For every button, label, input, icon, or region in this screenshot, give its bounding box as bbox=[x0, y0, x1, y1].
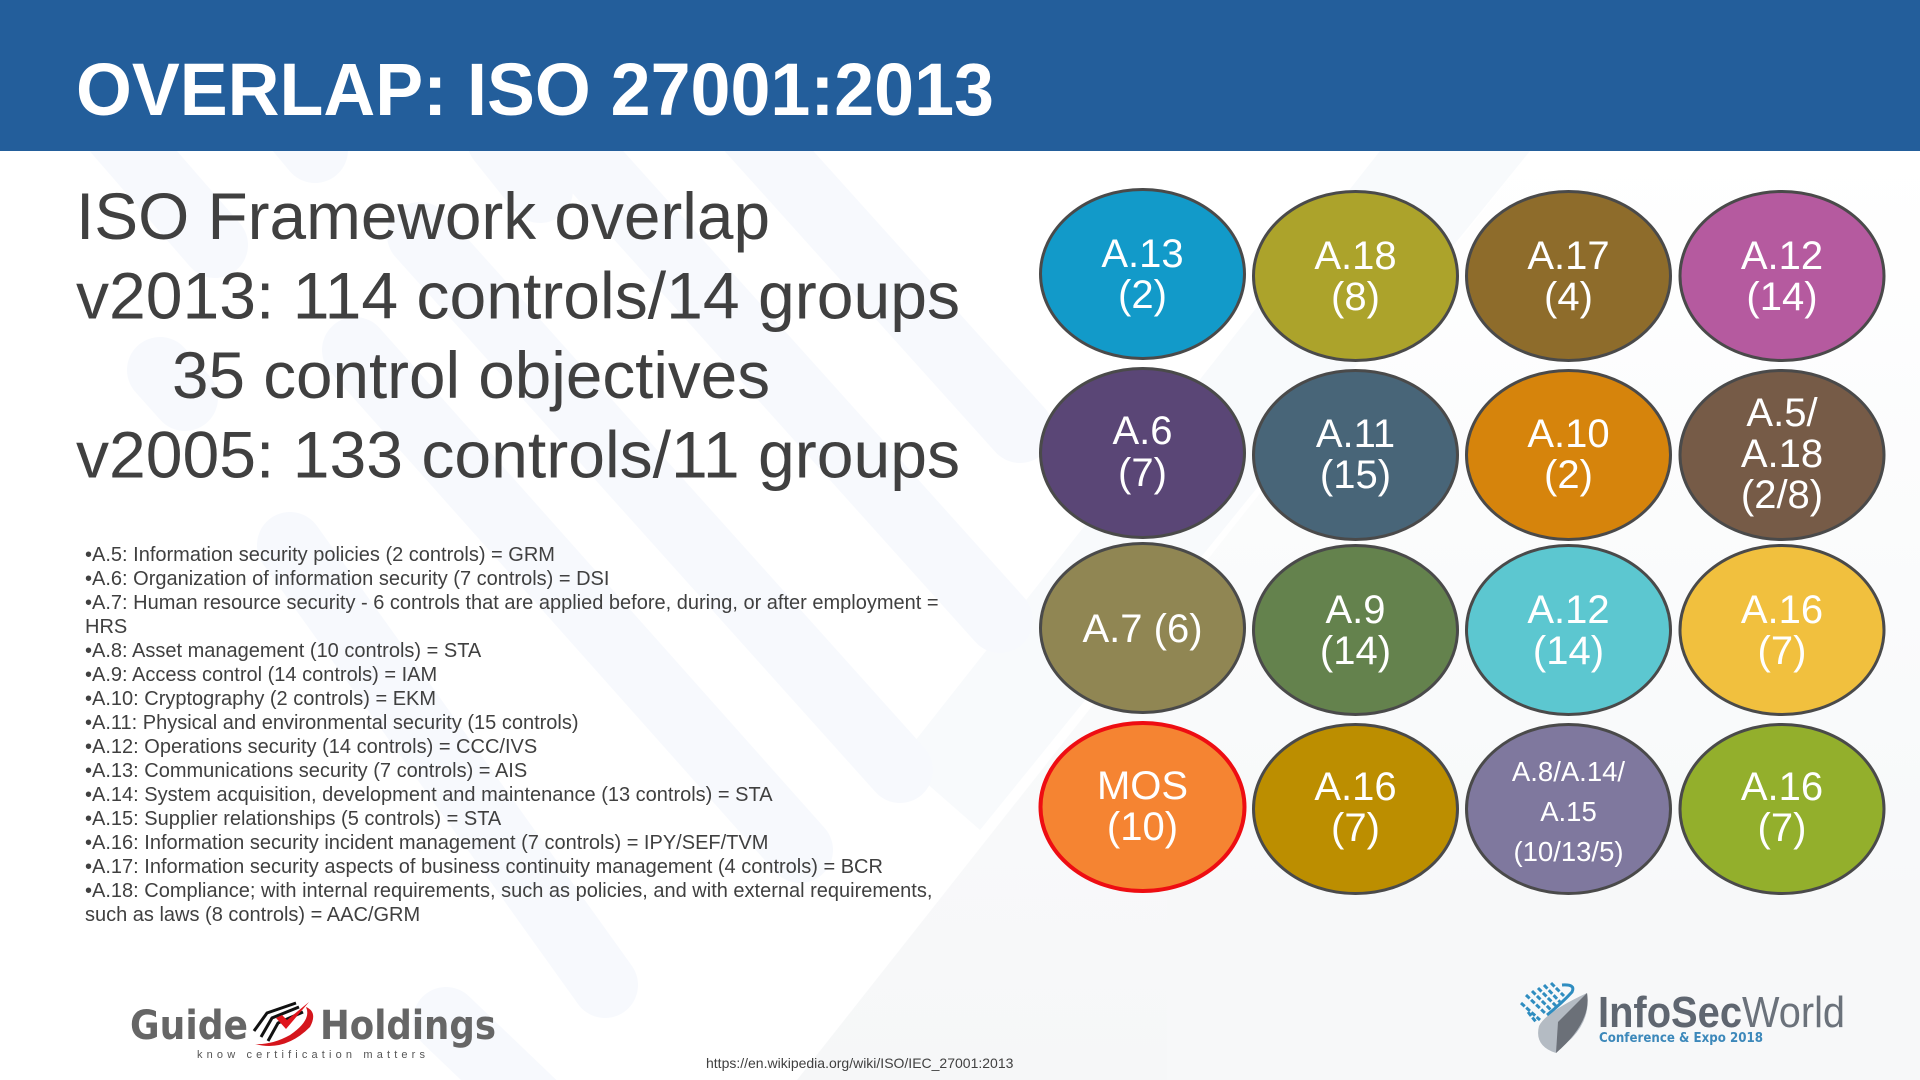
ellipse: A.5/A.18: (2/8) bbox=[1741, 473, 1823, 517]
ellipse: A.6: (7) bbox=[1118, 451, 1167, 495]
ellipse: A.9 bbox=[1254, 546, 1458, 714]
ellipse: A.7: A.7 (6) bbox=[1082, 607, 1203, 651]
logo: InfoSecWorld bbox=[1521, 983, 1845, 1053]
ellipse: A.18: (8) bbox=[1331, 275, 1380, 319]
ellipse: A.12 bbox=[1466, 546, 1670, 714]
control list text block bbox=[85, 544, 939, 926]
ellipse: A.18 bbox=[1254, 192, 1458, 360]
ellipse: A.16 bbox=[1680, 546, 1884, 714]
ellipse: A.16: (7) bbox=[1758, 629, 1806, 673]
ellipse: A.17: A.17 bbox=[1527, 234, 1610, 278]
control list text block: •A.16: Information security incident management (7 controls) = IPY/SEF/TVM bbox=[85, 832, 768, 854]
control list text block: •A.17: Information security aspects of business continuity management (4 controls) = BCR bbox=[85, 856, 883, 878]
icon: shield bbox=[1521, 983, 1588, 1053]
ellipse: A.10: A.10 bbox=[1527, 412, 1610, 456]
logo: InfoSecWorld: InfoSec bbox=[1598, 988, 1742, 1037]
ellipse: A.8/A.14/A.15: A.15 bbox=[1540, 796, 1597, 827]
header banner bbox=[0, 0, 1920, 151]
heading text block: ISO Framework overlap bbox=[76, 179, 770, 253]
ellipse: A.17: (4) bbox=[1544, 275, 1593, 319]
ellipse: A.8/A.14/A.15 bbox=[1466, 724, 1670, 894]
ellipse: A.12: A.12 bbox=[1741, 234, 1823, 278]
logo: InfoSecWorld: World bbox=[1742, 988, 1845, 1037]
ellipse: A.13: A.13 bbox=[1101, 232, 1184, 276]
control list text block: •A.10: Cryptography (2 controls) = EKM bbox=[85, 688, 436, 710]
ellipse: A.17 bbox=[1466, 192, 1670, 360]
heading text block: 35 control objectives bbox=[172, 338, 770, 412]
ellipse: A.12: (14) bbox=[1533, 629, 1604, 673]
ellipse: A.12: (14) bbox=[1746, 275, 1818, 319]
ellipse: A.10: (2) bbox=[1544, 453, 1593, 497]
icon: cards and check mark bbox=[254, 1002, 313, 1046]
ellipse: A.9: (14) bbox=[1320, 629, 1391, 673]
ellipse: A.16: (7) bbox=[1758, 806, 1806, 850]
ellipse: A.13: (2) bbox=[1118, 273, 1167, 317]
ellipse: A.11: A.11 bbox=[1316, 412, 1395, 456]
ellipse: A.16: (7) bbox=[1331, 806, 1380, 850]
ellipse: A.16 bbox=[1254, 724, 1458, 894]
ellipse: A.12 bbox=[1680, 192, 1884, 360]
control list text block: •A.11: Physical and environmental security (15 controls) bbox=[85, 712, 579, 734]
ellipse: A.6: A.6 bbox=[1112, 409, 1173, 453]
ellipse: A.5/A.18: A.5/ bbox=[1746, 391, 1818, 435]
logo: Guide Holdings: know certification matters bbox=[197, 1049, 426, 1061]
ellipse: A.11: (15) bbox=[1320, 453, 1391, 497]
ellipse: A.10 bbox=[1466, 370, 1670, 540]
control list text block: such as laws (8 controls) = AAC/GRM bbox=[85, 904, 420, 926]
control list text block: HRS bbox=[85, 616, 127, 638]
ellipse: A.16: A.16 bbox=[1741, 588, 1823, 632]
logo: Guide Holdings: Guide bbox=[130, 1003, 248, 1049]
ellipse: A.16: A.16 bbox=[1741, 765, 1823, 809]
control list text block: •A.9: Access control (14 controls) = IAM bbox=[85, 664, 437, 686]
ellipse: A.16: A.16 bbox=[1314, 765, 1397, 809]
heading text block bbox=[76, 179, 960, 492]
ellipse: A.7 bbox=[1040, 544, 1244, 712]
logo: Guide Holdings: Holdings bbox=[320, 1003, 496, 1049]
ellipse: A.8/A.14/A.15: (10/13/5) bbox=[1513, 836, 1624, 867]
ellipse: A.11 bbox=[1254, 370, 1458, 540]
ellipse: MOS: (10) bbox=[1107, 805, 1178, 849]
ellipse: A.9: A.9 bbox=[1325, 588, 1386, 632]
control list text block: •A.13: Communications security (7 controls) = AIS bbox=[85, 760, 527, 782]
control group ellipses grid bbox=[1040, 190, 1884, 894]
ellipse: A.5/A.18: A.18 bbox=[1741, 432, 1823, 476]
logo: Guide Holdings bbox=[130, 1002, 496, 1061]
ellipse: A.8/A.14/A.15: A.8/A.14/ bbox=[1512, 756, 1625, 787]
ellipse: A.5/A.18 bbox=[1680, 370, 1884, 540]
control list text block: •A.6: Organization of information security (7 controls) = DSI bbox=[85, 568, 609, 590]
ellipse: A.16 bbox=[1680, 724, 1884, 894]
ellipse: A.6 bbox=[1040, 368, 1244, 538]
control list text block: •A.15: Supplier relationships (5 controls) = STA bbox=[85, 808, 502, 830]
ellipse: A.18: A.18 bbox=[1314, 234, 1397, 278]
logo: InfoSecWorld: Conference & Expo 2018 bbox=[1599, 1030, 1763, 1046]
title: OVERLAP: ISO 27001:2013 bbox=[76, 48, 994, 131]
ellipse: A.12: A.12 bbox=[1527, 588, 1610, 632]
heading text block: v2005: 133 controls/11 groups bbox=[76, 418, 960, 492]
control list text block: •A.12: Operations security (14 controls) = CCC/IVS bbox=[85, 736, 537, 758]
control list text block: •A.8: Asset management (10 controls) = STA bbox=[85, 640, 482, 662]
ellipse: A.13 bbox=[1040, 190, 1244, 358]
control list text block: •A.14: System acquisition, development and maintenance (13 controls) = STA bbox=[85, 784, 773, 806]
control list text block: •A.18: Compliance; with internal requirements, such as policies, and with external requirements, bbox=[85, 880, 932, 902]
control list text block: •A.5: Information security policies (2 controls) = GRM bbox=[85, 544, 555, 566]
control list text block: •A.7: Human resource security - 6 controls that are applied before, during, or after employment = bbox=[85, 592, 939, 614]
heading text block: v2013: 114 controls/14 groups bbox=[76, 258, 960, 332]
source url: https://en.wikipedia.org/wiki/ISO/IEC_27001:2013 bbox=[706, 1055, 1014, 1071]
ellipse: MOS: MOS bbox=[1097, 764, 1188, 808]
ellipse: MOS bbox=[1040, 723, 1244, 891]
